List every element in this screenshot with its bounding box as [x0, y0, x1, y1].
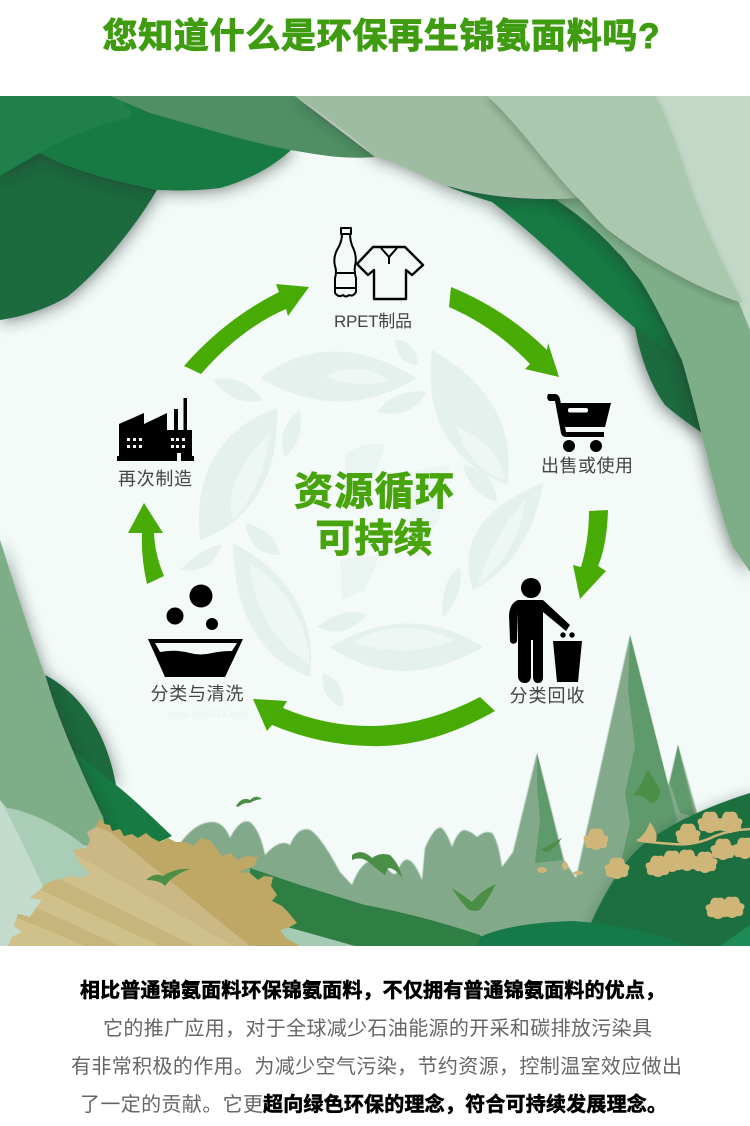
- icon: shopping cart: [547, 394, 611, 452]
- panel: paper-cut forest scene: [0, 96, 750, 950]
- title: 您知道什么是环保再生锦氨面料吗?: [102, 17, 660, 56]
- birds: [236, 770, 660, 911]
- label: sell or use: 出售或使用: [541, 456, 633, 476]
- label: RPET products: RPET制品: [334, 312, 412, 331]
- arrow: washing to re-manufacture: [128, 503, 164, 584]
- ground hill: [250, 868, 490, 946]
- arrow: RPET to sale: [449, 287, 559, 377]
- golden tree: [8, 818, 300, 946]
- body text: 它的推广应用，对于全球减少石油能源的开采和碳排放污染具: [103, 1017, 652, 1040]
- arrow: recycling to washing: [253, 697, 495, 746]
- icon: person with bin: [509, 578, 582, 683]
- arrow: re-manufacture to RPET: [184, 284, 309, 374]
- central heading: [294, 471, 454, 561]
- top-left leaves: [0, 96, 375, 320]
- gold blossom branch: [537, 812, 750, 919]
- body text: 超向绿色环保的理念，符合可持续发展理念。: [263, 1092, 667, 1116]
- label: remanufacture: 再次制造: [118, 469, 192, 489]
- body text: [71, 978, 682, 1116]
- label: sort and recycle: 分类回收: [510, 686, 584, 706]
- watermark: faded leaves and globe: [180, 340, 543, 707]
- cycle arrows: [128, 284, 608, 746]
- icon: factory: [117, 398, 194, 461]
- body text: 有非常积极的作用。为减少空气污染，节约资源，控制温室效应做出: [71, 1055, 682, 1078]
- icon: bottle and t-shirt: [334, 228, 423, 299]
- arrow: sale to recycling: [573, 510, 608, 599]
- left leaves: [0, 540, 355, 946]
- central heading: 可持续: [316, 518, 432, 561]
- bird on tree: [146, 869, 190, 886]
- right hill: [590, 793, 750, 946]
- icon: wash basin with bubbles: [148, 584, 243, 677]
- central heading: 资源循环: [294, 471, 454, 514]
- label: sort and clean: 分类与清洗: [150, 684, 244, 704]
- body text: 了一定的贡献。它更: [80, 1093, 263, 1116]
- distant mountains and hills: [178, 635, 697, 946]
- body text: 相比普通锦氨面料环保锦氨面料，不仅拥有普通锦氨面料的优点，: [80, 978, 665, 1002]
- mountain shaded facets: [535, 635, 695, 880]
- front hill: [478, 921, 690, 946]
- top-right leaves: [295, 96, 750, 572]
- watermark: site url: www.sotu114.com: [167, 709, 248, 720]
